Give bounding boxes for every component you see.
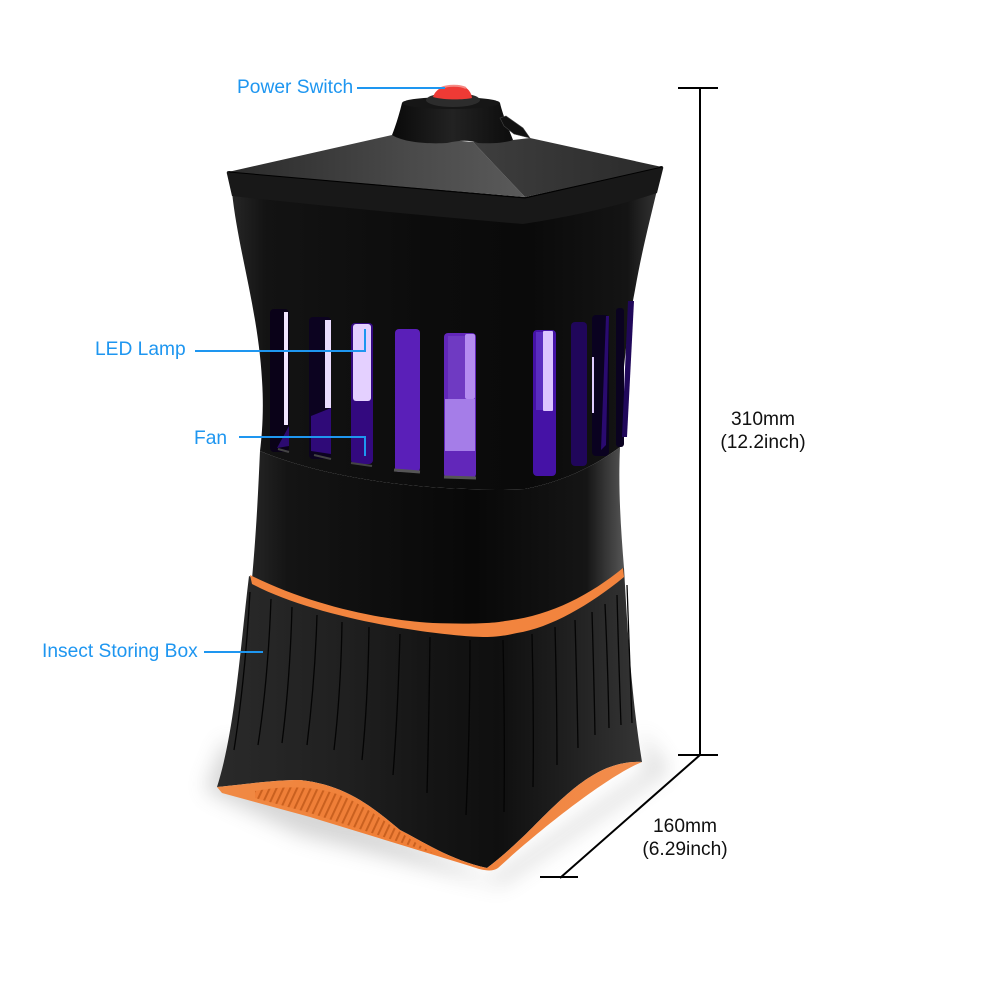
middle body xyxy=(250,447,624,650)
label: LED Lamp: LED Lamp xyxy=(95,339,186,360)
height label: 310mm xyxy=(731,409,795,430)
orange ring xyxy=(250,568,624,637)
label: LED Lamp xyxy=(95,329,365,360)
power switch button xyxy=(426,85,480,107)
depth label: 160mm xyxy=(653,816,717,837)
slot 2 xyxy=(309,317,331,459)
slot 4 xyxy=(394,329,420,472)
vent slits xyxy=(234,585,632,815)
upper body with slots xyxy=(232,190,657,489)
cable clip xyxy=(500,116,530,138)
slot 10 xyxy=(622,301,634,437)
slot 3 xyxy=(351,323,373,466)
slot 8 xyxy=(592,315,609,456)
product: mosquito killer lamp xyxy=(217,85,663,870)
label: Fan: Fan xyxy=(194,428,227,449)
slot 1 xyxy=(270,309,289,452)
light slots xyxy=(270,301,634,478)
slot 7 xyxy=(571,322,587,466)
orange base xyxy=(217,762,642,870)
top knob xyxy=(392,97,530,143)
lid xyxy=(227,135,663,224)
floor shadow xyxy=(205,730,668,885)
slot 5 xyxy=(444,333,476,478)
slot 9 xyxy=(616,308,624,447)
slot 6 xyxy=(533,330,556,476)
height label: (12.2inch) xyxy=(720,432,806,453)
depth dimension xyxy=(540,755,728,878)
depth label: (6.29inch) xyxy=(642,839,728,860)
height dimension xyxy=(678,88,806,755)
label: Insect Storing Box: Insect Storing Box xyxy=(42,641,198,662)
label: Fan xyxy=(194,428,365,456)
insect storing box xyxy=(217,568,642,868)
label: Power Switch: Power Switch xyxy=(237,77,353,98)
